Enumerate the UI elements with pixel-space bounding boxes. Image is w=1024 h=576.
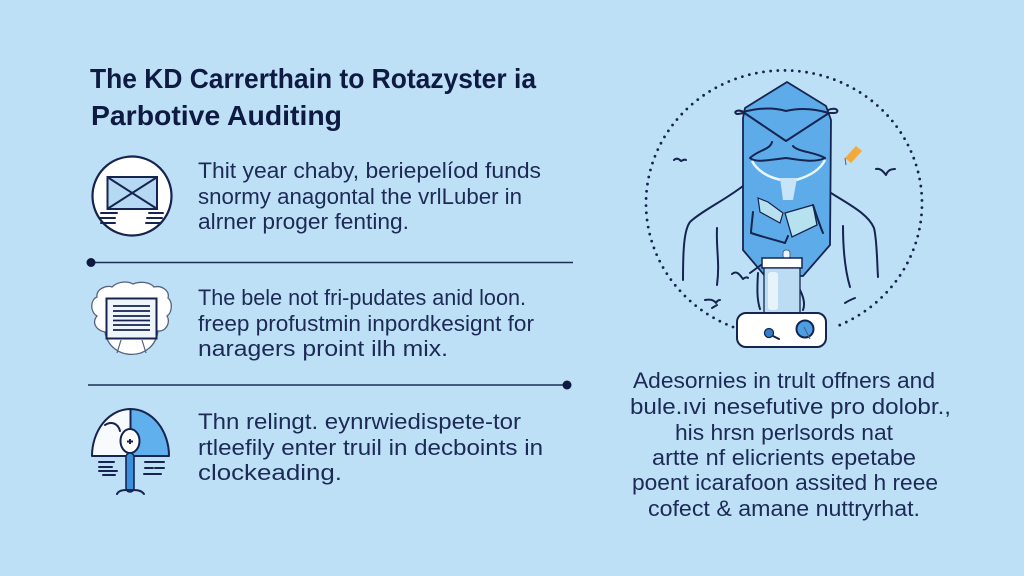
text block: first item: alrner proger fenting. (198, 209, 409, 234)
icon: envelope (92, 156, 172, 236)
text block: right caption: cofect & amane nuttryrhat. (648, 496, 920, 521)
jar and base (737, 250, 826, 347)
text block: right caption: Adesornies in trult offners and (633, 368, 935, 393)
title: Parbotive Auditing (91, 100, 342, 131)
text block: second item: naragers proint ilh mix. (198, 336, 448, 361)
title (90, 63, 537, 131)
face (750, 142, 825, 161)
text block: right caption: poent icarafoon assited h reee (632, 470, 938, 495)
birds (674, 159, 895, 308)
text block: third item: rtleefily enter truil in decboints in (198, 435, 543, 460)
text block: first item: snormy anagontal the vrlLuber in (198, 184, 522, 209)
blue hood body (743, 82, 831, 276)
text block: third item (198, 409, 543, 485)
title: The KD Carrerthain to Rotazyster ia (90, 63, 537, 94)
icon: cloud document (92, 282, 171, 354)
text block: right caption (630, 368, 951, 521)
text block: third item: Thn relingt. eynrwiedispete-tor (198, 409, 521, 434)
text block: right caption: his hrsn perlsords nat (675, 420, 893, 445)
held papers (751, 198, 823, 243)
text block: right caption: artte nf elicrients epetabe (652, 445, 916, 470)
text block: third item: clockeading. (198, 460, 342, 485)
dotted circle (646, 70, 922, 327)
text block: second item (198, 285, 534, 361)
illustration: figure in dotted circle (646, 70, 922, 347)
divider with right dot (88, 380, 572, 390)
text block: first item (198, 158, 541, 234)
text block: second item: freep profustmin inpordkesignt for (198, 311, 534, 336)
text block: second item: The bele not fri-pudates anid loon. (198, 285, 526, 310)
pencil (845, 146, 862, 165)
figure shoulders (683, 186, 878, 287)
text block: right caption: bule.ıvi nesefutive pro dolobr., (630, 394, 951, 419)
text block: first item: Thit year chaby, beriepelíod funds (198, 158, 541, 183)
divider with left dot (86, 258, 573, 267)
icon: dial gauge (92, 409, 169, 494)
